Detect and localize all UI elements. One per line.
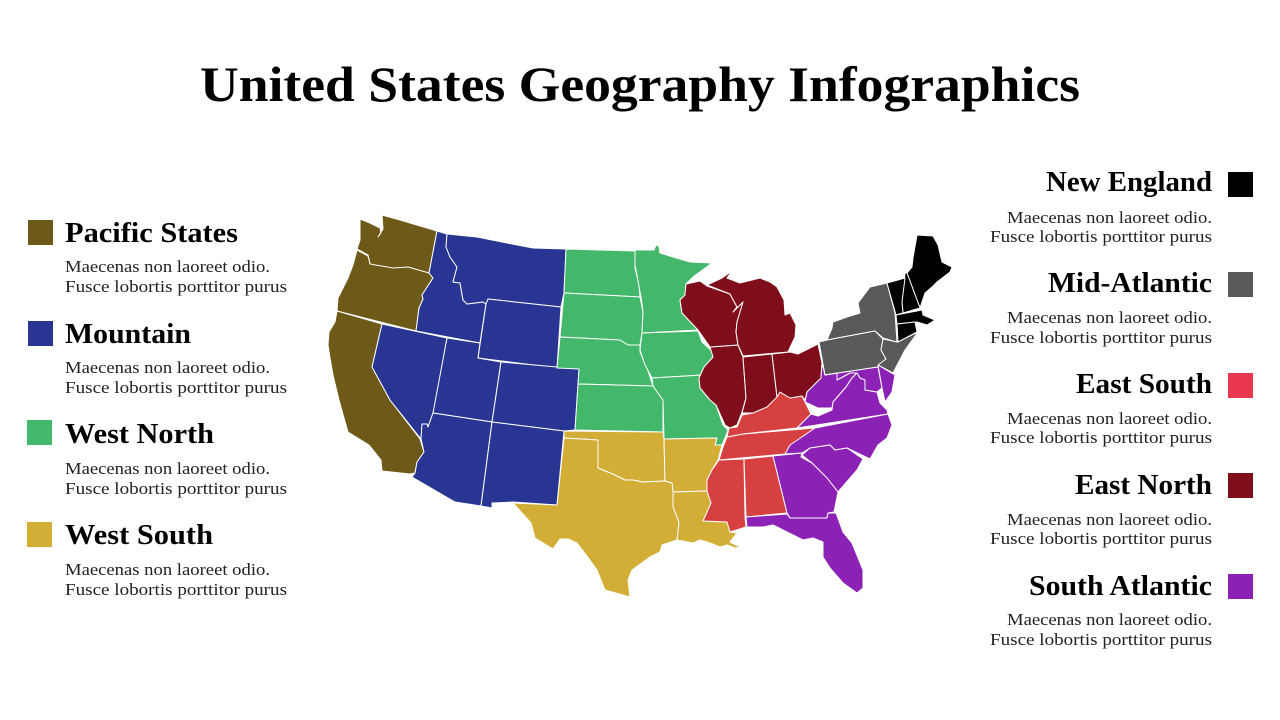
region: East South — [703, 392, 815, 532]
legend: New England: Fusce lobortis porttitor purus — [990, 227, 1212, 246]
legend: South Atlantic: Maecenas non laoreet odio. — [1007, 610, 1212, 629]
legend: New England: New England — [1046, 166, 1212, 198]
legend: West North — [27, 418, 287, 498]
legend: West North: Maecenas non laoreet odio. — [65, 459, 270, 478]
legend: East South: East South — [1076, 368, 1212, 400]
legend: Mountain: Maecenas non laoreet odio. — [65, 358, 270, 377]
legend: East North — [990, 469, 1253, 548]
legend: East South — [990, 368, 1253, 447]
legend: West North: Fusce lobortis porttitor purus — [65, 479, 287, 498]
legend: New England — [990, 166, 1253, 246]
legend: New England: Maecenas non laoreet odio. — [1007, 208, 1212, 227]
legend: East North: East North — [1075, 469, 1212, 501]
region: New England — [887, 235, 952, 342]
legend: Mid-Atlantic: Mid-Atlantic — [1048, 267, 1212, 299]
region: Mid-Atlantic — [819, 283, 918, 375]
region: Mountain — [372, 231, 579, 508]
legend: East South: Fusce lobortis porttitor purus — [990, 428, 1212, 447]
legend: Pacific States: Fusce lobortis porttitor purus — [65, 277, 287, 296]
legend: West South: Maecenas non laoreet odio. — [65, 560, 270, 579]
legend: South Atlantic: South Atlantic — [1029, 570, 1212, 602]
region: East North — [680, 271, 822, 428]
legend: Pacific States — [28, 217, 287, 296]
region: Pacific States — [328, 215, 437, 474]
legend: West South — [27, 519, 287, 599]
legend: Mountain: Mountain — [65, 318, 191, 350]
legend: West North: West North — [65, 418, 214, 450]
title: United States Geography Infographics — [200, 56, 1080, 112]
legend: East North: Maecenas non laoreet odio. — [1007, 510, 1212, 529]
region: South Atlantic — [746, 363, 895, 593]
legend: South Atlantic: Fusce lobortis porttitor purus — [990, 630, 1212, 649]
legend: Mountain: Fusce lobortis porttitor purus — [65, 378, 287, 397]
legend: West South: West South — [65, 519, 213, 551]
legend: Mid-Atlantic: Fusce lobortis porttitor purus — [990, 328, 1212, 347]
legend: Mountain — [28, 318, 287, 397]
legend: East South: Maecenas non laoreet odio. — [1007, 409, 1212, 428]
legend: East North: Fusce lobortis porttitor purus — [990, 529, 1212, 548]
region: West South — [513, 431, 740, 597]
legend: South Atlantic — [990, 570, 1253, 649]
legend: Mid-Atlantic: Maecenas non laoreet odio. — [1007, 308, 1212, 327]
legend: West South: Fusce lobortis porttitor purus — [65, 580, 287, 599]
legend: Pacific States: Maecenas non laoreet odio. — [65, 257, 270, 276]
region: West North — [557, 245, 728, 445]
legend: Mid-Atlantic — [990, 267, 1253, 347]
legend: Pacific States: Pacific States — [65, 217, 238, 249]
map of the United States — [328, 215, 952, 597]
